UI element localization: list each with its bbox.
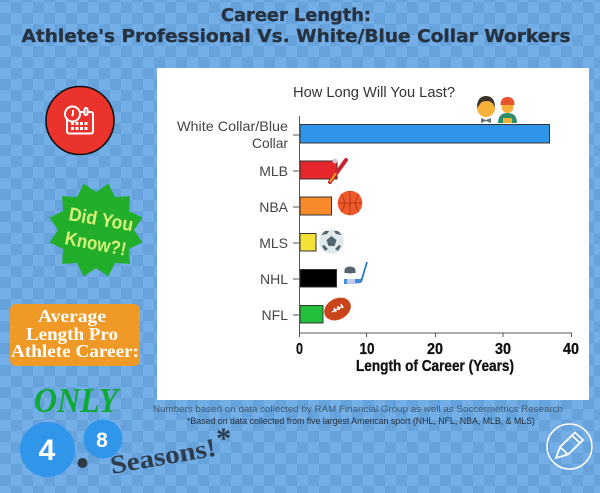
number badge: 4: 4 [39, 434, 56, 467]
source note: Numbers based on data collected by RAM Financial Group as well as Soccermetrics Research [153, 404, 563, 415]
starburst: Did You Know: Did You [67, 204, 135, 236]
text: Seasons [108, 422, 231, 480]
category labels: NFL [262, 307, 288, 323]
callout: average length: Athlete Career: [11, 341, 139, 361]
bars [300, 124, 550, 323]
category labels: MLB [259, 163, 288, 179]
category labels: NBA [259, 199, 289, 215]
text: ONLY: ONLY [34, 381, 121, 420]
text: Seasons: Seasons! [108, 433, 218, 480]
chart title: How Long Will You Last? [293, 84, 455, 101]
icon: baseball bat [330, 158, 346, 182]
icon: hockey puck and stick [344, 262, 367, 284]
icon: basketball [338, 191, 362, 215]
axis tick labels: 10 [360, 341, 375, 358]
category labels: MLS [259, 235, 288, 251]
title: Career Length: [221, 6, 371, 26]
category labels: NHL [260, 271, 288, 287]
icon: football [320, 293, 355, 325]
icon: calendar and stopwatch badge [46, 86, 114, 154]
category labels: White Collar/Blue [177, 118, 288, 134]
axis tick labels: 40 [563, 341, 579, 358]
axis tick labels [296, 341, 579, 358]
callout: average length: Length Pro [26, 324, 118, 344]
text: Seasons: * [216, 422, 231, 455]
icon: pencil badge [547, 424, 592, 469]
icon: soccer ball [319, 229, 344, 254]
number badge: 8: 8 [96, 429, 108, 452]
axis tick labels: 30 [495, 341, 511, 358]
starburst: Did You Know [50, 184, 142, 276]
panel: chart [157, 68, 589, 400]
footnote: *Based on data collected from five largest American sport (NHL, NFL, NBA, MLB, & MLS) [187, 416, 535, 427]
number badge: 4 [20, 422, 75, 477]
category labels: Collar [252, 135, 288, 151]
axis title: Length of Career (Years) [356, 358, 514, 375]
title [22, 6, 570, 47]
icon: blue collar worker [498, 97, 517, 123]
axis tick labels: 20 [427, 341, 443, 358]
icon: white collar worker [477, 96, 495, 123]
number badge: 8 [84, 420, 122, 458]
category labels [177, 118, 289, 323]
starburst: Did You Know: Know?! [63, 228, 128, 261]
axes [293, 116, 572, 337]
callout: average length: Average [38, 306, 106, 326]
callout: average length [10, 304, 140, 366]
decimal point [78, 458, 88, 468]
axis tick labels: 0 [296, 341, 303, 358]
title: Athlete's Professional Vs. White/Blue Collar Workers [22, 27, 570, 47]
